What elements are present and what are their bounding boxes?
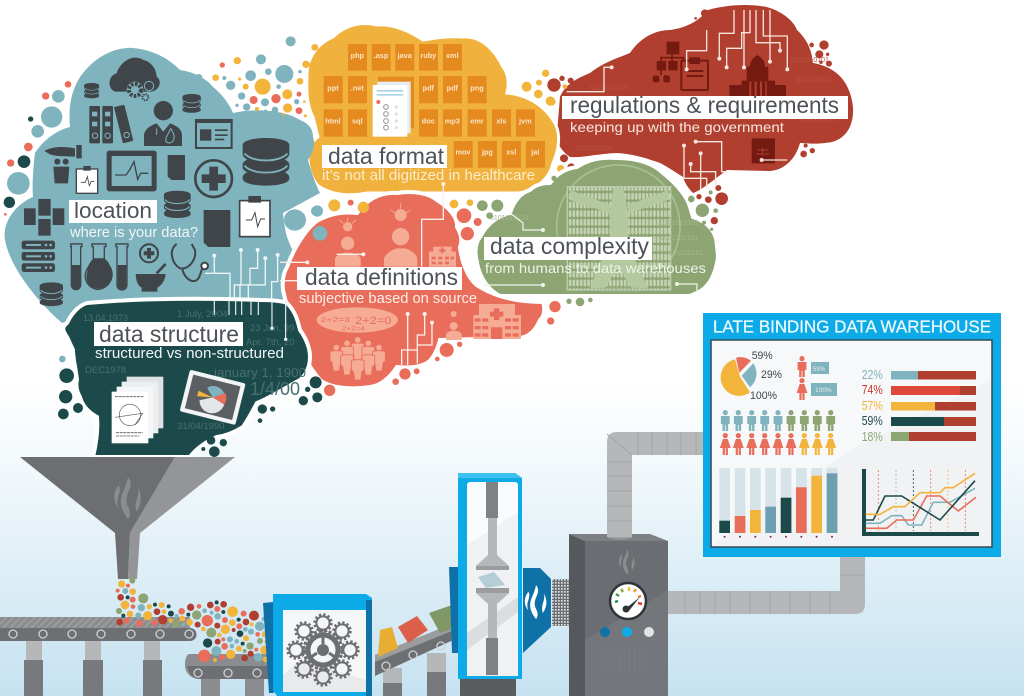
block: green (429, 605, 453, 633)
faint red binary (575, 57, 837, 152)
vitruvian figure (557, 165, 680, 290)
icon: lab glassware (71, 244, 128, 290)
binary mesh connector (552, 579, 580, 626)
speech ellipse (317, 307, 398, 333)
file type tiles: mp3 (445, 116, 460, 125)
faint red binary: 0110100101 (590, 85, 629, 92)
gender legend: 100% (815, 387, 832, 394)
regulations subheading: keeping up with the government (570, 119, 784, 135)
icon: doctor (144, 101, 182, 146)
date watermark text: 31/04/1990 (177, 421, 225, 432)
faint binary: 1001100101 (660, 235, 699, 242)
faint binary (490, 215, 704, 294)
main machine (569, 522, 668, 696)
press rods (476, 482, 509, 675)
location label (69, 200, 157, 223)
gender legend: 59% (813, 367, 826, 373)
vent grille (606, 649, 648, 672)
date watermark text: january 1, 1900 (213, 365, 306, 380)
file type tiles: .asp (374, 51, 389, 60)
icon: clipboard small (76, 166, 98, 193)
file type tiles: png (470, 83, 484, 92)
icon: funnel flame (114, 477, 141, 519)
icon: crowd (330, 337, 385, 380)
icon: ID card (195, 119, 233, 148)
panel: regulations cloud (547, 5, 853, 224)
pie labels: 29% (761, 369, 782, 381)
red cloud circuit lines (567, 10, 789, 190)
file type tiles: mov (455, 148, 471, 157)
teal cloud icons (22, 58, 289, 306)
red cloud dots (547, 9, 832, 224)
red cloud icons (653, 42, 786, 163)
location circuit lines (205, 248, 280, 320)
icon: mortar and pestle (136, 244, 166, 292)
icon: documents (24, 199, 64, 236)
data format heading: data format (328, 143, 445, 169)
structure circuit lines (214, 300, 287, 341)
structure heading: data structure (99, 321, 239, 347)
monitor title: LATE BINDING DATA WAREHOUSE (713, 316, 991, 336)
speech ellipse: 2+2=3 (321, 315, 350, 324)
definitions dots (286, 199, 561, 396)
conveyor: left belt with legs (0, 617, 196, 696)
pie labels: 100% (750, 390, 777, 402)
pipe: top elbow (607, 432, 710, 538)
icon: binders (89, 105, 133, 143)
date watermark text: 23 Jun. 99 (250, 323, 294, 334)
horizontal percentage bars: 74% (862, 383, 883, 397)
file type tiles: jai (530, 148, 539, 157)
icon: server (22, 241, 55, 272)
file type tiles: xsl (506, 148, 516, 157)
file type tiles: pdf (447, 83, 459, 92)
faint red binary: 0101010101 (790, 57, 829, 64)
people pictogram (720, 410, 836, 455)
icon: small person (446, 311, 462, 340)
file type tiles: jvm (518, 116, 532, 125)
complexity subheading: from humans to data warehouses (485, 260, 706, 276)
definitions subheading: subjective based on source (299, 290, 477, 307)
complexity circuit lines (484, 213, 697, 293)
faint red binary: 0101100101 (798, 117, 837, 124)
icon: hand over family (44, 145, 82, 183)
icon: monitor pulse (107, 151, 157, 191)
funnel (20, 457, 235, 579)
monitor screen (711, 340, 992, 547)
horizontal percentage bars: 18% (862, 430, 883, 444)
file type tiles: ppt (327, 83, 339, 92)
yellow cloud left and right dots (294, 44, 567, 117)
file type tiles (324, 44, 545, 168)
file type tiles: .net (351, 83, 364, 92)
conveyor: lower belt (185, 654, 275, 696)
data particles (116, 578, 269, 662)
date watermark text (83, 309, 306, 432)
file type tiles: sql (352, 116, 363, 125)
document icon (373, 82, 411, 137)
icon: person with idea left (335, 218, 361, 267)
block: pressed cube (478, 572, 505, 588)
faint red binary: 1001100101 (795, 77, 834, 84)
icon: machine flame (619, 550, 635, 574)
speech ellipse: 2+2=4 (342, 327, 366, 333)
right conveyor with blocks (375, 605, 462, 696)
file type tiles: ruby (420, 51, 437, 60)
pie labels (750, 350, 782, 402)
file type tiles: xml (446, 51, 459, 60)
press machine (449, 473, 580, 696)
icon: duct flame (525, 585, 546, 619)
panel: data format cloud (307, 23, 559, 195)
panel: data complexity cloud (476, 158, 718, 296)
gear machine (263, 594, 372, 696)
gender legend (797, 356, 837, 400)
teal cloud dots (4, 36, 325, 244)
pie labels: 59% (752, 350, 773, 362)
icon: plus circle (195, 160, 232, 197)
pipe: lower elbow (665, 555, 865, 614)
complexity label (484, 237, 652, 260)
complexity heading: data complexity (490, 233, 649, 259)
pie chart (721, 357, 756, 396)
horizontal percentage bars: 59% (862, 414, 883, 428)
data format label (322, 145, 447, 168)
faint binary: 0101100101 (600, 287, 639, 294)
gauge (610, 583, 646, 619)
horizontal percentage bars (862, 368, 976, 444)
definitions heading: data definitions (305, 264, 458, 290)
faint red binary: 1001011001 (575, 145, 614, 152)
gears (288, 615, 358, 685)
icon: small hospital (429, 247, 456, 267)
horizontal percentage bars: 22% (862, 368, 883, 382)
faint binary: 0101010101 (660, 220, 699, 227)
data format subheading: it’s not all digitized in healthcare (322, 167, 535, 184)
file type tiles: java (397, 51, 413, 60)
horizontal percentage bars: 57% (862, 399, 883, 413)
speech ellipse: 2+2=0 (355, 315, 391, 327)
dark cloud dots (58, 356, 322, 457)
blue duct (523, 568, 551, 653)
regulations heading: regulations & requirements (570, 92, 839, 118)
icon: cloud with gears (110, 58, 160, 100)
panel: data structure cloud (58, 299, 322, 457)
file type tiles: pdf (423, 83, 435, 92)
file type tiles: html (325, 116, 341, 125)
file type tiles: xls (496, 116, 506, 125)
lower green dots (551, 176, 718, 306)
block: red (398, 616, 428, 643)
location heading: location (74, 198, 152, 223)
vertical bar chart (719, 468, 837, 538)
structure label (94, 322, 243, 346)
faint binary: 0101100101 (665, 250, 704, 257)
file type tiles: php (351, 51, 365, 60)
date watermark text: DEC1978 (85, 365, 126, 376)
regulations label (562, 96, 848, 119)
icon: paper stack (112, 377, 163, 443)
date watermark text: Apr. 7th, 20 (246, 337, 295, 348)
file type tiles: emr (470, 116, 484, 125)
icon: stethoscope (172, 244, 208, 281)
date watermark text: 13.04.1973 (83, 313, 128, 323)
block: yellow (378, 627, 398, 657)
faint binary: 0101010101 (490, 215, 529, 222)
panel: location cloud (4, 36, 567, 323)
panel: monitor late binding data warehouse (703, 313, 1001, 557)
icon: clipboard large (240, 196, 270, 237)
structure subheading: structured vs non-structured (95, 345, 284, 362)
icon: large hospital (473, 304, 521, 339)
indicator lights (600, 627, 654, 637)
date watermark text: 1/4/00 (250, 379, 300, 399)
line chart (864, 469, 979, 534)
location subheading: where is your data? (69, 224, 198, 241)
date watermark text: 1 July, 2004 (177, 309, 228, 320)
icon: tablet pie chart (180, 370, 246, 425)
file type tiles: jpg (481, 148, 493, 157)
definitions label (297, 267, 462, 290)
definitions circuit lines (280, 182, 445, 365)
file type tiles: doc (422, 116, 435, 125)
panel: data definitions cloud (280, 176, 718, 396)
definitions icons (317, 203, 521, 380)
icon: doctor with idea (384, 203, 417, 267)
